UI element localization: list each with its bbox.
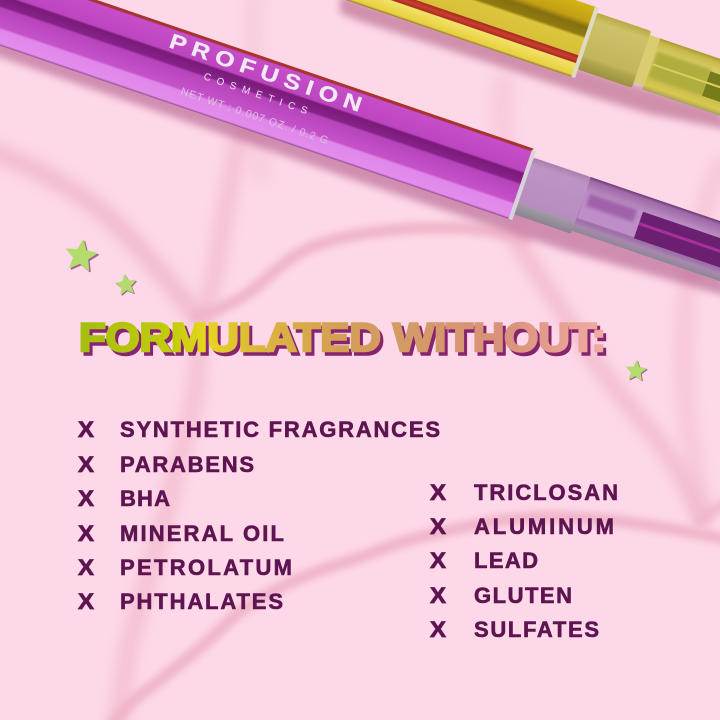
clear collar [578, 13, 651, 88]
item: X [78, 555, 94, 580]
star right top [625, 360, 647, 380]
tip interior dark [586, 194, 637, 222]
item: X [78, 589, 94, 614]
item name: SYNTHETIC FRAGRANCES [120, 417, 440, 442]
item: X [78, 452, 94, 477]
item: X [430, 514, 446, 539]
red edge [0, 0, 533, 151]
item name: LEAD [474, 548, 538, 573]
item: X [78, 417, 94, 442]
barrel end ring [509, 150, 536, 220]
star small top [115, 273, 137, 295]
barrel end ring [571, 7, 599, 78]
item name: GLUTEN [474, 583, 572, 608]
tip interior [577, 191, 643, 237]
gold barrel [99, 0, 596, 77]
item name: SULFATES [474, 617, 599, 642]
list: left column [78, 417, 440, 614]
item: X [430, 480, 446, 505]
tip interior [648, 51, 712, 96]
purple barrel [0, 0, 533, 219]
shadow: gold pen [340, 0, 720, 130]
star large [66, 240, 100, 272]
item: X [78, 521, 94, 546]
brand: cosmetics: COSMETICS [202, 71, 309, 117]
star large top [64, 238, 98, 271]
item name: ALUMINUM [474, 514, 614, 539]
pen tip section [642, 38, 720, 144]
item: X [430, 548, 446, 573]
tip core line [652, 63, 720, 117]
item: X [430, 583, 446, 608]
item: X [78, 486, 94, 511]
star small [116, 274, 138, 296]
pen brand text [167, 29, 365, 147]
tip core [634, 212, 720, 280]
item name: BHA [120, 486, 170, 511]
item name: MINERAL OIL [120, 521, 284, 546]
purple pen [0, 0, 720, 301]
gold pen [99, 0, 720, 154]
tip core [702, 71, 720, 128]
net weight: NET WT : 0.007 OZ. / 0.2 G [179, 85, 330, 147]
item name: PETROLATUM [120, 555, 292, 580]
title shadow: FORMULATED WITHOUT: [82, 320, 609, 364]
shadow: purple pen [0, 30, 720, 297]
connector [633, 35, 660, 86]
title: FORMULATED WITHOUT: [79, 316, 606, 360]
item name: PHTHALATES [120, 589, 283, 614]
pen tip section [572, 177, 720, 292]
brand: profusion: PROFUSION [167, 29, 365, 116]
item name: PARABENS [120, 452, 254, 477]
clear collar [514, 158, 590, 234]
item: X [430, 617, 446, 642]
item name: TRICLOSAN [474, 480, 618, 505]
tip core line [638, 222, 720, 267]
star right [626, 361, 648, 381]
list: right column [430, 480, 618, 642]
